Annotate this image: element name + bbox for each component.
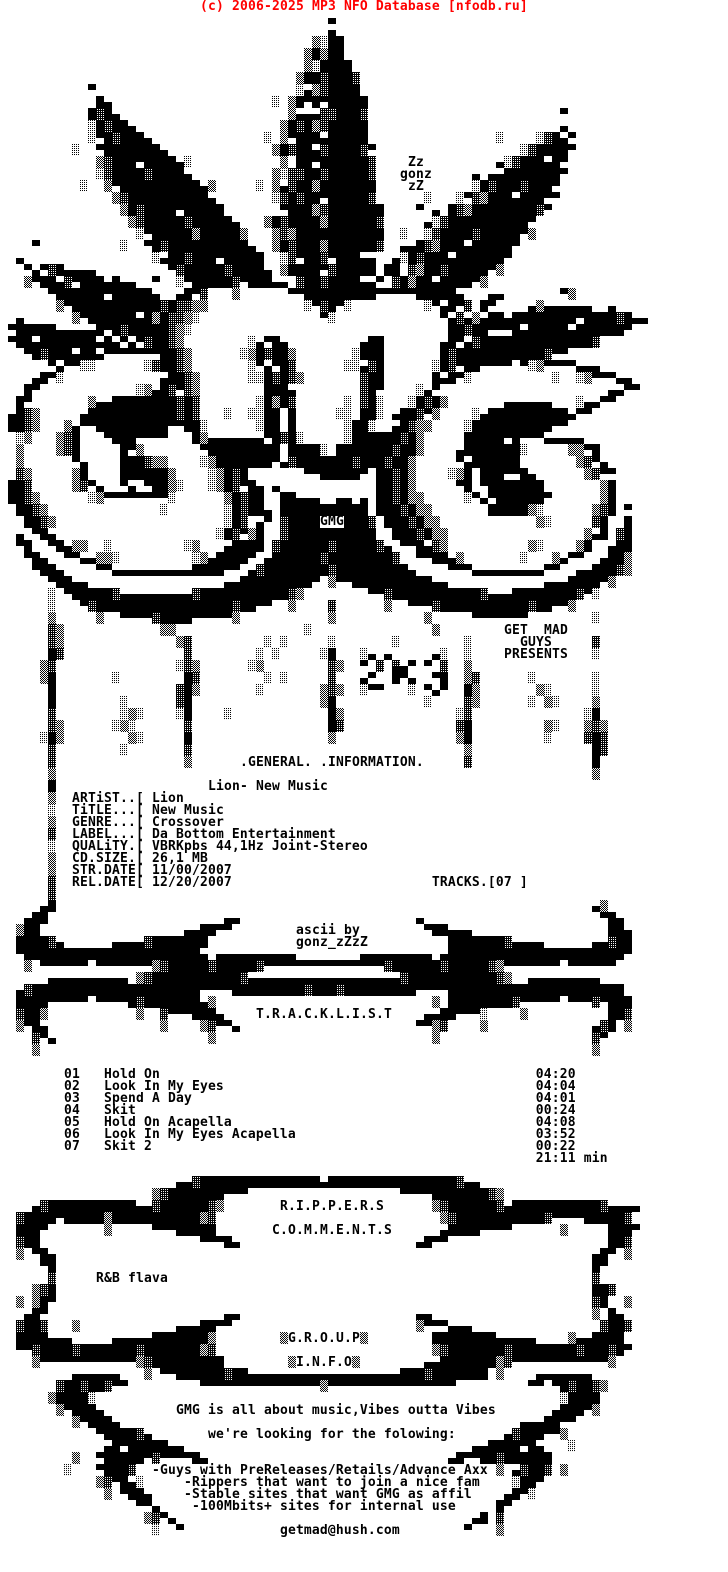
divider: tracklist ornament [16,903,632,1050]
text: release details: ARTiST..[ Lion TiTLE...[ New Music GENRE...[ Crossover LABEL...[ Da Bottom Entertainment QUALiTY.[ VBRKpbs 44,1Hz Joint-Stereo CD.SIZE.[ 26,1 MB STR.DATE[ 11/00/2007 REL.DATE[ 12/20/2007 TRACKS.[07 ] [72,791,528,890]
frame: group info wings [48,1386,608,1530]
text: presents caption: GET MAD GUYS PRESENTS [504,623,568,662]
ascii art: left leaf [16,87,288,297]
heading: group: G.R.O.U.P [288,1331,360,1346]
ascii art: centre leaf [256,21,384,297]
text: track listing: 01 Hold On 04:20 02 Look In My Eyes 04:04 03 Spend A Day 04:01 04 Skit 00:24 05 Hold On Acapella 04:08 06 Look In My Eyes Acapella 03:52 07 Skit 2 00:22 21:11 min [64,1067,608,1166]
text: GMG badge: GMG [320,514,344,529]
ascii art: GMG logo [8,303,648,621]
heading: general information: .GENERAL. .INFORMATION. [240,755,424,770]
heading: rippers: R.I.P.P.E.R.S [280,1199,384,1214]
text: release title: Lion- New Music [208,779,328,794]
heading: comments: C.O.M.M.E.N.T.S [272,1223,392,1238]
text: artist signature: Zz gonz zZ [400,155,432,194]
ascii art: dripping columns [40,618,608,894]
icon: 2x3 block lettering [360,657,448,693]
text: comment body: R&B flava [96,1271,168,1286]
heading: info: I.N.F.O [296,1355,352,1370]
ascii art: right leaf [376,111,576,297]
text: ascii credit: ascii by gonz_zZzZ [296,923,368,950]
heading: tracklist: T.R.A.C.K.L.I.S.T [256,1007,392,1022]
text: group description: GMG is all about music,Vibes outta Vibes we're looking for the folowing: -Guys with PreReleases/Retails/Advance Axx -Rippers that want to join a nice fam -Stable sites that want GMG as affil -100Mbits+ sites for internal use getmad@hush.com [152,1403,496,1538]
frame: comments panel [16,1179,640,1383]
